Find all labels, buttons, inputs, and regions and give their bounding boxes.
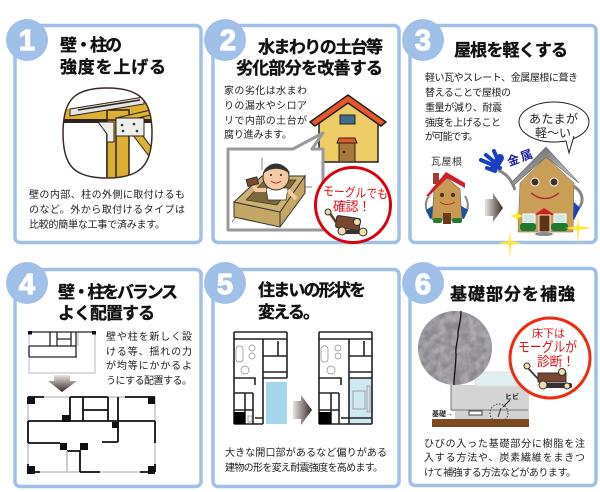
panel: 6 reinforce the foundation: [402, 262, 596, 486]
body text 6: ひびの入った基礎部分に樹脂を注: [424, 437, 585, 450]
number badge 4: 4: [19, 269, 35, 301]
body text 6: 入する方法や、炭素繊維をまきつ: [424, 451, 585, 464]
floor plan before: [234, 332, 287, 424]
number badge 6: [402, 262, 444, 304]
body text 2: [224, 84, 307, 141]
panel 3 frame: [410, 26, 596, 242]
body text 3: [425, 71, 578, 143]
heading 3: 屋根を軽くする: [454, 41, 568, 60]
heading 4: よく配置する: [58, 304, 155, 323]
callout: moguru robot diagnosis: モーグルが: [518, 339, 577, 355]
panel: 2 repair deteriorated sills: [204, 19, 399, 242]
number badge 3: [402, 19, 444, 61]
body text 6: けて補強する方法などがあります。: [424, 466, 576, 479]
body text 5: 大きな開口部があるなど偏りがある: [225, 446, 387, 459]
heading 1: 壁・柱の: [60, 36, 122, 55]
floor plan before: [28, 331, 96, 373]
panel: 5 change the building shape: [204, 262, 399, 486]
icon: small house with heavy tile roof: [426, 172, 468, 224]
body text 3: 軽い瓦やスレート、金属屋根に葺き: [425, 71, 578, 84]
body text 2: リで内部の土台が: [224, 114, 307, 127]
icon: happy house with metal roof: 金属: [505, 146, 535, 169]
body text 4: [106, 330, 192, 387]
body text 4: 壁や柱を新しく設: [106, 330, 192, 343]
callout: moguru robot diagnosis: 診断！: [537, 354, 575, 369]
heading 5: 変える。: [258, 303, 320, 322]
body text 3: 強度を上げること: [425, 116, 501, 129]
body text 3: 重量が減り、耐震: [425, 101, 502, 114]
heading 5: 住まいの形状を: [258, 281, 366, 300]
body text 3: が可能です。: [425, 130, 478, 143]
callout: moguru robot diagnosis: [510, 318, 590, 398]
icon: happy house with metal roof: [481, 146, 582, 236]
callout: moguru robot check: [316, 168, 390, 242]
callout: moguru robot diagnosis: 床下は: [532, 327, 565, 340]
body text 1: [29, 188, 185, 231]
panel: 4 balanced placement of walls: [6, 262, 201, 486]
arrow: to lightweight roof: [485, 193, 503, 222]
panel 6 frame: [410, 268, 596, 486]
illustration: wall bracket on wooden frame: [60, 85, 155, 182]
heading 2: 水まわりの土台等: [258, 37, 383, 57]
body text 6: [424, 437, 585, 479]
panel: 3 lighten the roof: [402, 19, 596, 260]
speech bubble: head feels light: 軽〜い: [535, 126, 571, 140]
icon: house: [310, 95, 386, 162]
illustration: foundation with crack: [432, 372, 529, 427]
speech bubble: head feels light: あたまが: [529, 111, 578, 126]
heading 5: [258, 281, 366, 322]
icon: sparkles: [498, 208, 591, 260]
number badge 5: [204, 262, 246, 304]
floor plan after: [319, 332, 372, 424]
number badge 6: 6: [415, 269, 431, 301]
body text 4: ける等、揺れの力: [106, 345, 192, 358]
heading 4: [58, 283, 178, 323]
speech bubble: head feels light: [519, 102, 589, 153]
number badge 4: [6, 262, 48, 304]
body text 1: のなど。外から取付けるタイプは: [29, 203, 185, 216]
floor plan after: [27, 397, 155, 474]
illustration: foundation with crack: ヒビ: [505, 392, 519, 401]
callout: worker inspecting the sill: [228, 133, 323, 230]
photo: cracked concrete: [418, 311, 492, 385]
panel: 1 strengthen walls and columns: [6, 19, 201, 242]
heading 1: [60, 36, 166, 77]
body text 4: が均等にかかるよ: [106, 359, 192, 372]
number badge 1: [6, 19, 48, 61]
panel 4 frame: [15, 270, 201, 486]
panel 2 frame: [213, 26, 399, 242]
heading 2: [236, 37, 383, 78]
callout: moguru robot check: 確認！: [333, 199, 371, 214]
panel 1 frame: [15, 26, 201, 242]
callout: moguru robot check: モーグルでも: [323, 183, 388, 202]
body text 4: うにする配置する。: [106, 375, 192, 387]
body text 5: 建物の形を変え耐震強度を高めます。: [225, 461, 383, 474]
label: tile roof: 瓦屋根: [431, 155, 462, 168]
heading 1: 強度を上げる: [60, 58, 166, 77]
arrow: plan changes: [293, 395, 312, 425]
body text 5: [225, 446, 387, 474]
number badge 5: 5: [217, 269, 233, 301]
heading 2: 劣化部分を改善する: [236, 58, 383, 78]
number badge 2: [204, 19, 246, 61]
illustration: foundation with crack: 基礎→: [432, 409, 453, 418]
number badge 3: 3: [415, 25, 431, 57]
body text 1: 壁の内部、柱の外側に取付けるも: [29, 188, 185, 201]
panel 5 frame: [213, 270, 399, 486]
body text 2: 家の劣化は水まわ: [224, 84, 307, 97]
body text 2: りの漏水やシロア: [224, 100, 307, 112]
number badge 1: 1: [19, 25, 35, 57]
arrow: plan improved: [48, 375, 77, 392]
body text 1: 比較的簡単な工事で済みます。: [29, 218, 165, 231]
heading 4: 壁・柱をバランス: [58, 283, 178, 302]
body text 3: 替えることで屋根の: [425, 86, 511, 99]
number badge 2: 2: [220, 25, 236, 57]
heading 6: 基礎部分を補強: [450, 285, 575, 304]
body text 2: 腐り進みます。: [224, 128, 292, 141]
